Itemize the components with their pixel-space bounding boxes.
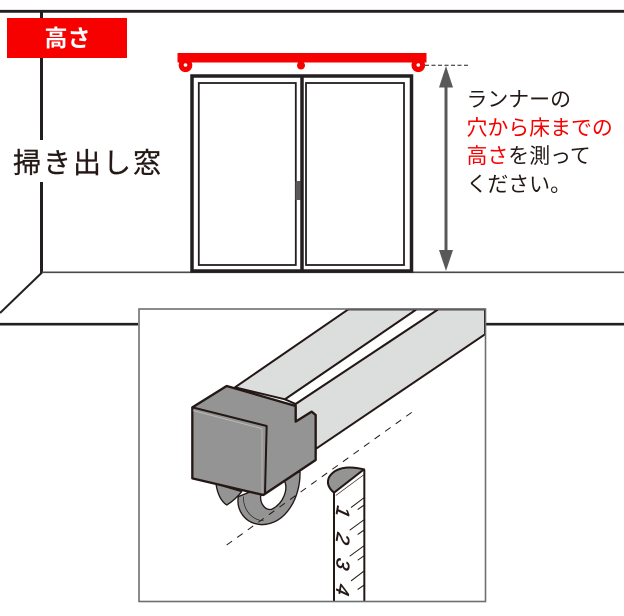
panel border: [139, 309, 486, 602]
dashed reference line: [425, 64, 469, 66]
tape measure: [328, 467, 364, 601]
tape numbers: 2: [331, 529, 353, 549]
heading badge: 高さ: 高さ: [44, 25, 90, 51]
rail body: [235, 309, 485, 448]
instruction text: 高さを測って: [466, 145, 591, 168]
detail panel: runner hole close-up: [139, 309, 486, 602]
end cap: [192, 386, 316, 495]
dashed measuring line: [227, 410, 415, 545]
instruction text: 穴から床までの: [466, 117, 613, 140]
window frame: [192, 76, 412, 271]
instruction text: ください。: [466, 174, 571, 196]
tape numbers: 3: [331, 554, 353, 574]
pulley wheels: [216, 472, 300, 525]
curtain rail with runners: [178, 53, 426, 72]
height arrow: [439, 66, 453, 271]
tape numbers: 4: [331, 580, 353, 600]
window handle: [296, 181, 300, 200]
instruction text: ランナーの: [466, 88, 571, 112]
heading badge: 高さ: [7, 18, 127, 58]
room outline: [0, 11, 624, 324]
tape numbers: [331, 502, 353, 600]
tape numbers: 1: [331, 502, 353, 522]
label: 掃き出し窓: 掃き出し窓: [13, 148, 163, 178]
